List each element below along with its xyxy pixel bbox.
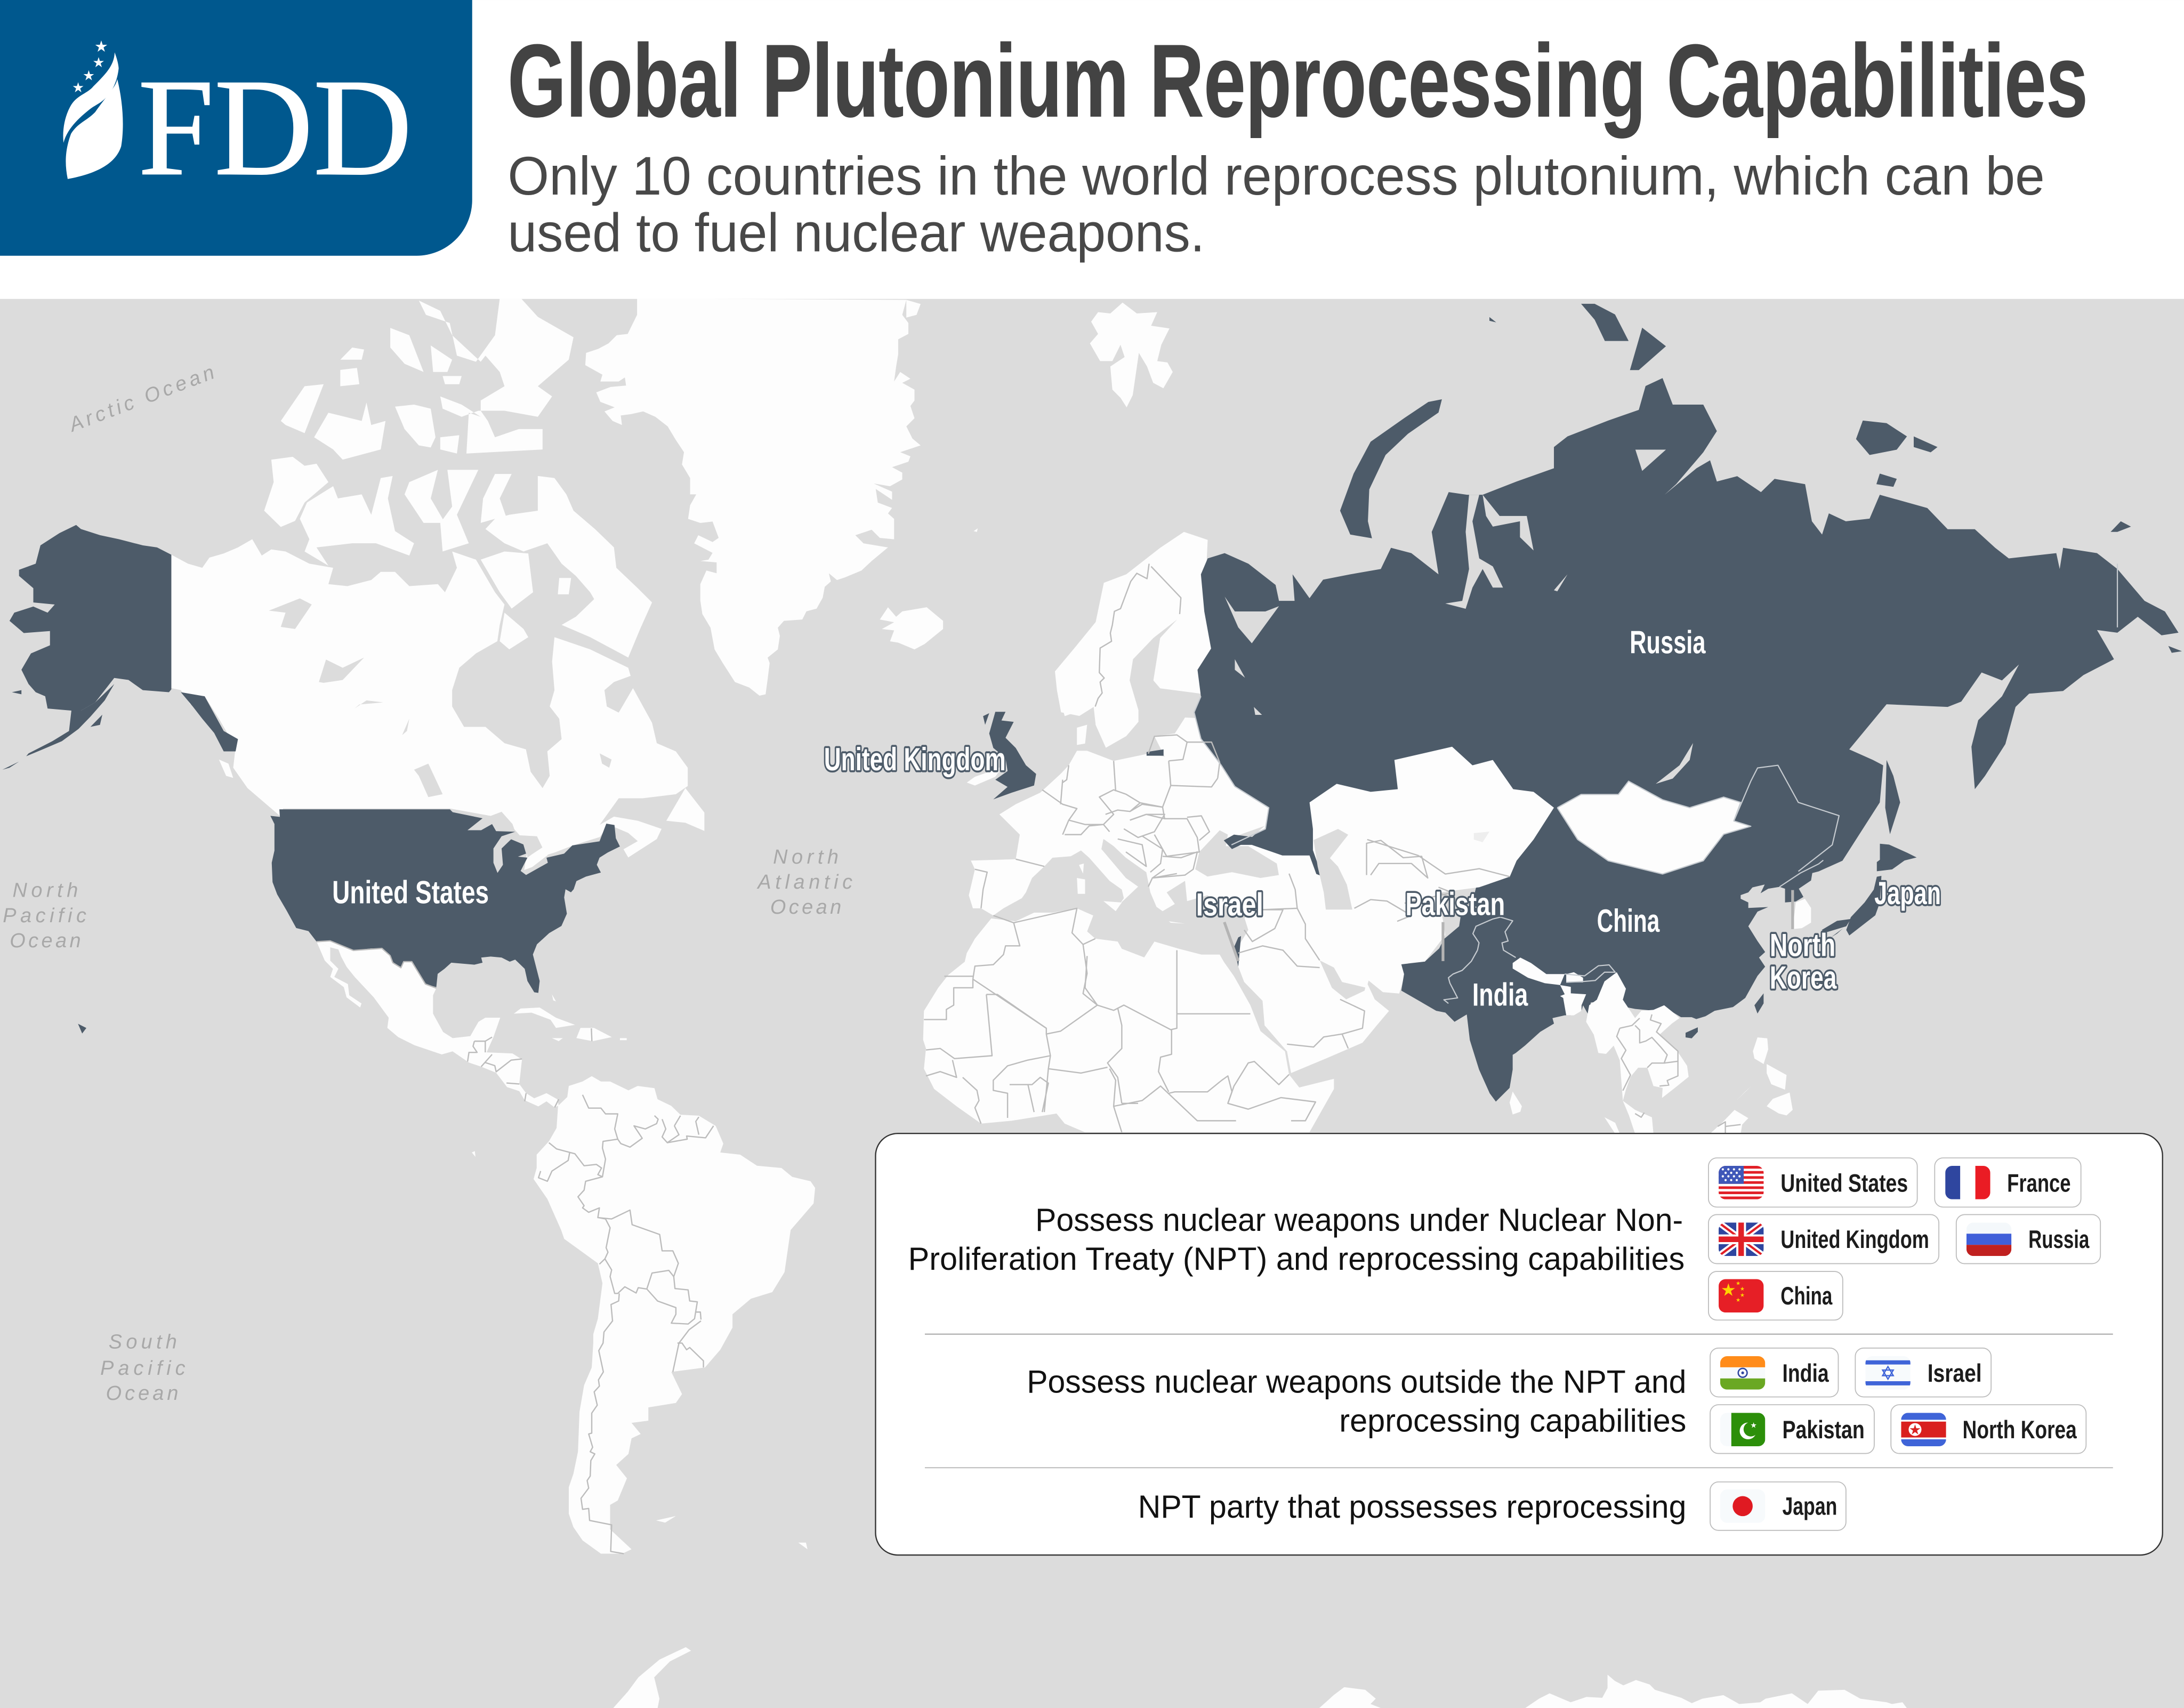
legend text: NPT weapons states: Proliferation Treaty (NPT) and reprocessing capabilities — [908, 1241, 1685, 1277]
subtitle: used to fuel nuclear weapons. — [507, 203, 1205, 263]
chip: France — [1935, 1158, 2081, 1207]
chip: Pakistan: Pakistan — [1782, 1415, 1865, 1444]
legend text: outside NPT: Possess nuclear weapons outside the NPT and — [1027, 1364, 1686, 1399]
chip: United States: United States — [1780, 1169, 1908, 1197]
chip: India: India — [1782, 1359, 1829, 1387]
country borders: Scandinavia and Central Asia — [1095, 564, 1181, 706]
chip: Israel: Israel — [1928, 1359, 1982, 1387]
map label: Japan: Japan — [1874, 875, 1941, 911]
ocean label: North Atlantic Ocean — [756, 846, 852, 919]
subtitle: Only 10 countries in the world reprocess plutonium, which can be — [507, 146, 2045, 206]
map label: China: China — [1597, 903, 1660, 939]
map label: North Korea: North — [1770, 928, 1835, 963]
ocean label: South Pacific Ocean: Ocean — [106, 1382, 178, 1405]
chip: India — [1710, 1348, 1838, 1397]
map label: India: India — [1472, 977, 1528, 1013]
ocean label: North Pacific Ocean — [3, 880, 86, 952]
chip: France: France — [2007, 1169, 2071, 1197]
country borders: Southeast Asia — [1617, 1014, 1740, 1133]
country: Hawaii (United States) — [78, 1024, 86, 1034]
country borders: Americas — [317, 564, 1740, 1554]
country: Russia with Sakhalin, Arctic islands — [1147, 304, 2182, 935]
chip: Pakistan — [1710, 1405, 1874, 1454]
header background — [0, 0, 2184, 299]
panel: legend — [875, 1133, 2163, 1555]
land: Greenland, Svalbard, Iceland — [585, 299, 1173, 696]
country: Japan — [1822, 844, 1916, 937]
map label: North Korea: Korea — [1770, 960, 1837, 996]
legend text: outside NPT: reprocessing capabilities — [1339, 1403, 1686, 1439]
white overlay: Nepal, Bhutan, Bangladesh, Southeast Asia, Korea, islands — [1510, 899, 1811, 1134]
Crimea — [1224, 835, 1256, 849]
country borders: Europe, Africa, Middle East — [924, 735, 1428, 1132]
chip: China: China — [1780, 1282, 1833, 1310]
map label: Israel: Israel — [1196, 887, 1263, 922]
ocean label: Arctic Ocean: Arctic Ocean — [65, 361, 217, 437]
map label: United States: United States — [332, 874, 489, 910]
ocean label: South Pacific Ocean — [100, 1331, 186, 1405]
chip: North Korea — [1891, 1405, 2086, 1454]
ocean label: North Atlantic Ocean: North — [773, 846, 839, 868]
map label: North Korea — [1770, 928, 1837, 996]
chip: Japan: Japan — [1782, 1492, 1837, 1520]
chip: United Kingdom: United Kingdom — [1780, 1225, 1929, 1253]
chip: Russia — [1956, 1214, 2100, 1263]
logo wordmark: FDD — [138, 50, 412, 205]
country: United Kingdom — [983, 712, 1036, 799]
chip: Japan — [1710, 1482, 1846, 1530]
land: Mexico, Central America and Caribbean — [317, 941, 627, 1107]
legend text: NPT party: NPT party that possesses reprocessing — [1138, 1489, 1686, 1525]
chip: China — [1708, 1271, 1843, 1320]
logo icon: leaf and stars — [63, 41, 123, 179]
chip: Israel — [1855, 1348, 1991, 1397]
legend text: outside NPT — [1027, 1364, 1686, 1439]
white overlay: Kazakhstan, Central Asia, Mongolia — [1310, 747, 1751, 964]
legend text: NPT weapons states — [908, 1202, 1685, 1277]
leader line: Israel — [1224, 922, 1238, 961]
map label: Pakistan: Pakistan — [1405, 887, 1505, 922]
ocean label: South Pacific Ocean: Pacific — [100, 1357, 186, 1380]
chip: United States — [1708, 1158, 1917, 1207]
map label: United Kingdom: United Kingdom — [824, 742, 1006, 777]
country borders across dark countries — [1194, 563, 2117, 1003]
legend text: NPT weapons states: Possess nuclear weapons under Nuclear Non- — [1035, 1202, 1683, 1238]
land: Scandinavia — [1055, 532, 1211, 748]
ocean label: North Pacific Ocean: North — [13, 880, 78, 902]
land: Antarctica — [612, 1647, 1908, 1708]
chip: United Kingdom — [1708, 1214, 1939, 1263]
leader line: Pakistan — [1442, 922, 1444, 961]
chip: North Korea: North Korea — [1963, 1415, 2077, 1444]
land: Canada and Arctic islands — [171, 299, 704, 874]
map label: Russia: Russia — [1630, 624, 1706, 660]
ocean label: South Pacific Ocean: South — [109, 1331, 177, 1353]
ocean label: North Atlantic Ocean: Ocean — [770, 896, 841, 919]
subtitle — [507, 146, 2045, 263]
country: Alaska (United States) — [2, 525, 238, 770]
land: Europe, Africa, Middle East and Central Asia — [923, 693, 1412, 1132]
country: China, India, Pakistan and North Korea — [1401, 853, 1822, 1102]
chip: Russia: Russia — [2028, 1225, 2090, 1253]
ocean label: North Pacific Ocean: Pacific — [3, 905, 86, 927]
land: South America — [472, 1076, 815, 1554]
ocean label: North Pacific Ocean: Ocean — [10, 930, 81, 952]
seas and lakes — [269, 450, 1693, 909]
logo panel: FDD — [0, 0, 472, 256]
country: United States mainland — [270, 809, 620, 993]
ocean label: North Atlantic Ocean: Atlantic — [756, 871, 852, 893]
leader line: North Korea — [1792, 890, 1793, 929]
country: Israel — [1234, 936, 1241, 966]
